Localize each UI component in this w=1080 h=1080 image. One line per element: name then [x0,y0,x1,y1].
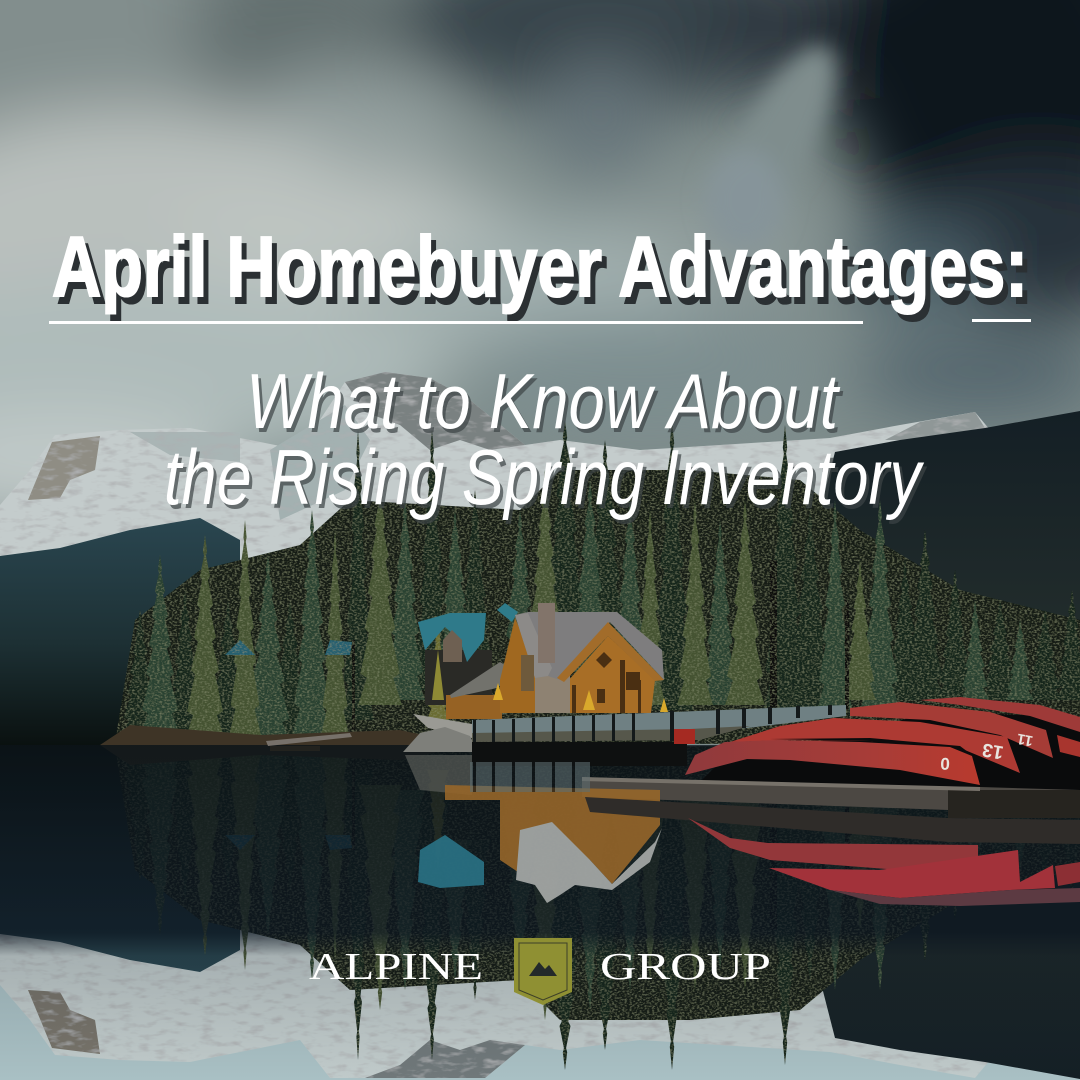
reflected snowy mountains [0,890,1080,1078]
subtitle text: What to Know About [246,357,841,445]
canoe 4 [920,697,1080,732]
stacked red canoes [685,697,1080,790]
logo word left: ALPINE [309,946,483,988]
title underline [49,319,1031,324]
blue-roofed cabin [418,603,518,705]
subtitle shadow [167,361,927,525]
canoe numbers: 13 [981,738,1005,763]
wisp of cloud upper right [701,30,859,250]
canoe reflection [688,818,1080,906]
bridge reflection [470,762,590,792]
title [52,220,1033,322]
canoe 3 [850,702,1053,758]
main roof [515,612,664,680]
lodge reflection [418,785,662,903]
red sign [674,729,695,744]
rocks and shore path [403,714,478,752]
gap between canoes [770,738,972,755]
reflected hills and forest [0,745,1080,1079]
wooden bridge with railing [472,705,846,766]
subtitle shadow: What to Know About [249,361,844,449]
left forested hillside [0,518,240,745]
canoe 1 [685,740,980,785]
right forested hillside [760,411,1080,745]
subtitle [164,357,927,525]
spruce forest [115,420,1080,745]
subtitle text: the Rising Spring Inventory [164,433,924,521]
canoe numbers: 11 [1016,730,1034,749]
black hull shadow [700,712,1080,790]
small left jetty [266,733,352,751]
mirrored landscape reflection [0,745,1080,1080]
main house walls [500,618,535,713]
lake surface [0,745,1080,1080]
canoe 2 [730,718,1020,773]
background photo: sky, mountains, forest [0,0,1080,745]
yellow umbrellas [493,683,668,712]
snowy mountains [0,372,1080,600]
canoe numbers [940,730,1034,773]
floating dock [582,777,1080,818]
lodge building [418,603,668,719]
subtitle text [164,357,924,521]
shoreline [100,725,470,745]
logo: Alpine Group [309,938,771,1005]
pale shore reflection [405,755,472,795]
reflected sky [0,745,1080,1080]
gable glazing and trim [572,652,641,713]
subtitle shadow: the Rising Spring Inventory [167,437,927,525]
dock reflection [585,797,1080,844]
teal roofs among trees [225,640,352,655]
logo word right: GROUP [600,946,771,988]
sky with storm clouds [0,0,1080,745]
canoe numbers: 0 [940,754,950,773]
left wing [446,662,517,719]
chimney [538,603,555,663]
icon: shield with mountain [514,938,572,1005]
